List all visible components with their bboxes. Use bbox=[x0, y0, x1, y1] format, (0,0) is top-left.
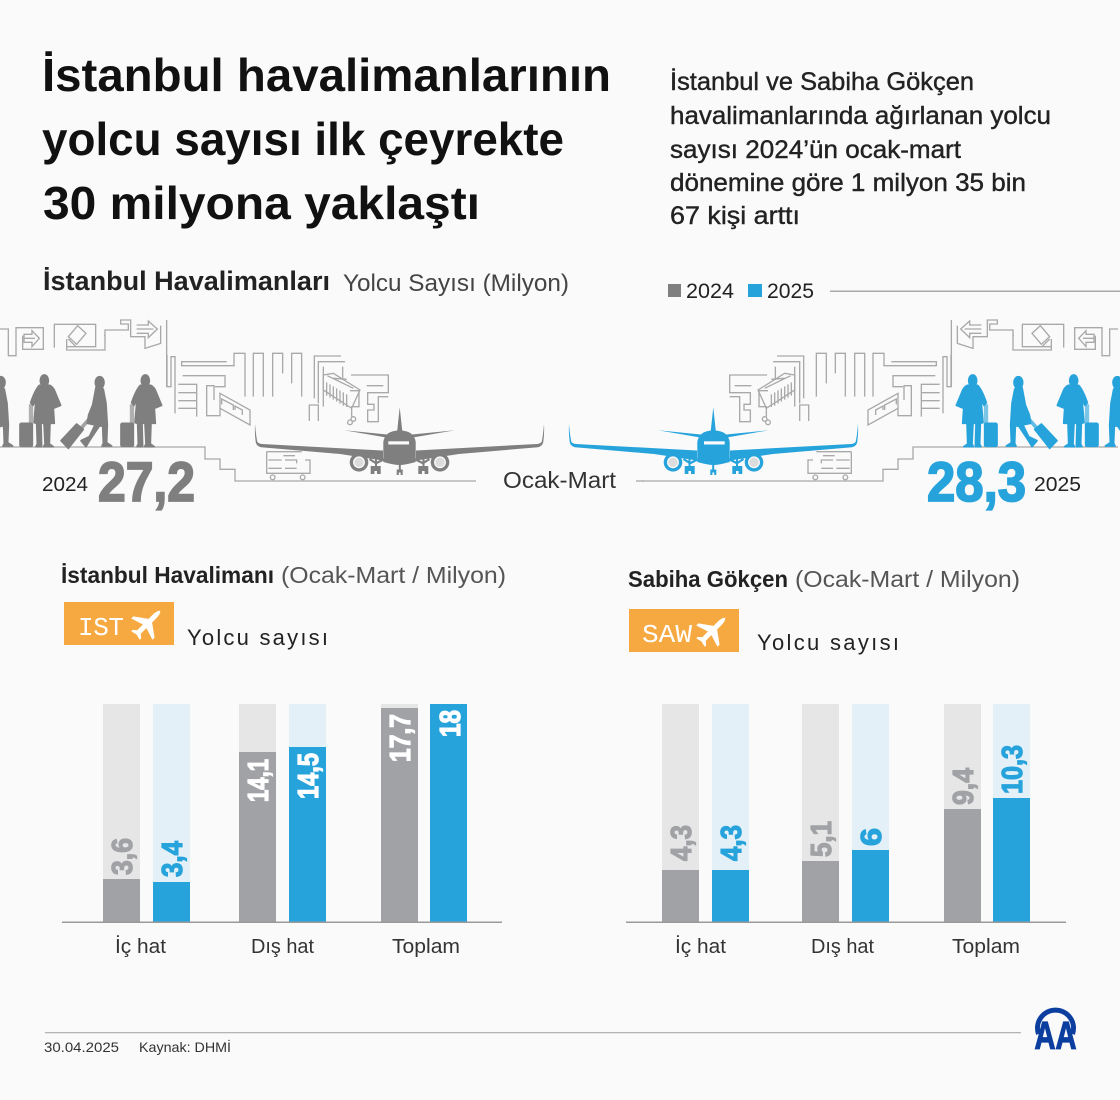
bar chart: IST: İç hat bbox=[115, 935, 166, 958]
icon: AA logo bbox=[1034, 1010, 1076, 1058]
stat 2024: 2024 bbox=[42, 474, 88, 496]
plane 2025 bbox=[569, 407, 858, 475]
panel heading: (Ocak-Mart / Milyon) bbox=[281, 562, 506, 588]
panel heading bbox=[61, 562, 506, 588]
panel: Istanbul Airport bbox=[61, 562, 506, 958]
icon: IST badge bbox=[64, 600, 174, 646]
panel heading: Sabiha Gökçen bbox=[628, 566, 788, 592]
intro text: 67 kişi arttı bbox=[670, 202, 800, 230]
stat 2024: 27,2 bbox=[98, 450, 195, 513]
intro text: sayısı 2024’ün ocak-mart bbox=[670, 136, 961, 164]
stat 2024 bbox=[42, 450, 195, 513]
icon: SAW badge bbox=[629, 607, 739, 653]
footer source: Kaynak: DHMİ bbox=[139, 1038, 231, 1055]
section heading: Istanbul airports: İstanbul Havalimanları bbox=[43, 266, 330, 296]
intro text: İstanbul ve Sabiha Gökçen bbox=[670, 67, 974, 96]
panel heading bbox=[628, 566, 1020, 592]
stat 2025: 2025 bbox=[1034, 474, 1081, 496]
title: yolcu sayısı ilk çeyrekte bbox=[42, 113, 564, 165]
bar chart: SAW: 9,4 bbox=[948, 768, 980, 805]
bar chart: SAW: 4,3 bbox=[666, 825, 698, 861]
legend: 2024 bbox=[686, 280, 734, 303]
bar chart: SAW: Dış hat bbox=[811, 936, 874, 958]
footer source: 30.04.2025 bbox=[44, 1039, 119, 1055]
bar chart: IST: 3,4 bbox=[157, 841, 189, 877]
subtitle: Yolcu sayısı bbox=[187, 625, 328, 650]
section heading: Istanbul airports bbox=[43, 266, 569, 297]
bar chart: IST: Dış hat bbox=[251, 936, 314, 958]
panel heading: İstanbul Havalimanı bbox=[61, 562, 274, 588]
passengers 2025 bbox=[956, 375, 1120, 448]
panel: Sabiha Gokcen bbox=[626, 566, 1066, 958]
bar chart: SAW: İç hat bbox=[675, 935, 726, 958]
bar chart: IST: 14,1 bbox=[243, 759, 275, 802]
plane 2024 bbox=[255, 407, 544, 475]
subtitle: Yolcu sayısı bbox=[757, 630, 899, 655]
bar chart: IST: 3,6 bbox=[107, 838, 139, 875]
title: 30 milyona yaklaştı bbox=[43, 177, 480, 229]
bar chart: SAW: 10,3 bbox=[997, 745, 1029, 794]
bar chart: IST bbox=[62, 704, 502, 958]
illustration: 2024 airport scene bbox=[0, 320, 476, 481]
bar chart: IST: 18 bbox=[435, 710, 467, 737]
title bbox=[42, 49, 611, 229]
icon: IST badge: IST bbox=[78, 613, 124, 643]
title: İstanbul havalimanlarının bbox=[42, 49, 611, 101]
panel heading: (Ocak-Mart / Milyon) bbox=[795, 566, 1020, 592]
bar chart: IST: 17,7 bbox=[385, 714, 417, 762]
intro text: havalimanlarında ağırlanan yolcu bbox=[670, 102, 1051, 130]
bar chart: IST: 14,5 bbox=[293, 753, 325, 799]
stat 2025: 28,3 bbox=[927, 450, 1026, 513]
footer source bbox=[44, 1032, 1021, 1055]
passengers 2024 bbox=[0, 375, 162, 448]
legend: 2025 bbox=[767, 280, 814, 303]
section heading: Istanbul airports: Yolcu Sayısı (Milyon) bbox=[343, 270, 569, 297]
legend bbox=[668, 280, 1120, 303]
bar chart: SAW: 6 bbox=[856, 828, 888, 846]
icon: SAW badge: SAW bbox=[642, 620, 692, 650]
icon: AA logo: AA bbox=[1034, 1015, 1076, 1058]
intro text bbox=[670, 67, 1051, 230]
intro text: dönemine göre 1 milyon 35 bin bbox=[670, 169, 1026, 197]
bar chart: SAW: 5,1 bbox=[806, 821, 838, 857]
bar chart: SAW: Toplam bbox=[952, 936, 1020, 958]
bar chart: SAW: 4,3 bbox=[716, 825, 748, 861]
period label: Ocak-Mart bbox=[503, 467, 617, 493]
bar chart: SAW bbox=[626, 704, 1066, 958]
bar chart: IST: Toplam bbox=[392, 936, 460, 958]
illustration: 2025 airport scene bbox=[642, 320, 1120, 481]
